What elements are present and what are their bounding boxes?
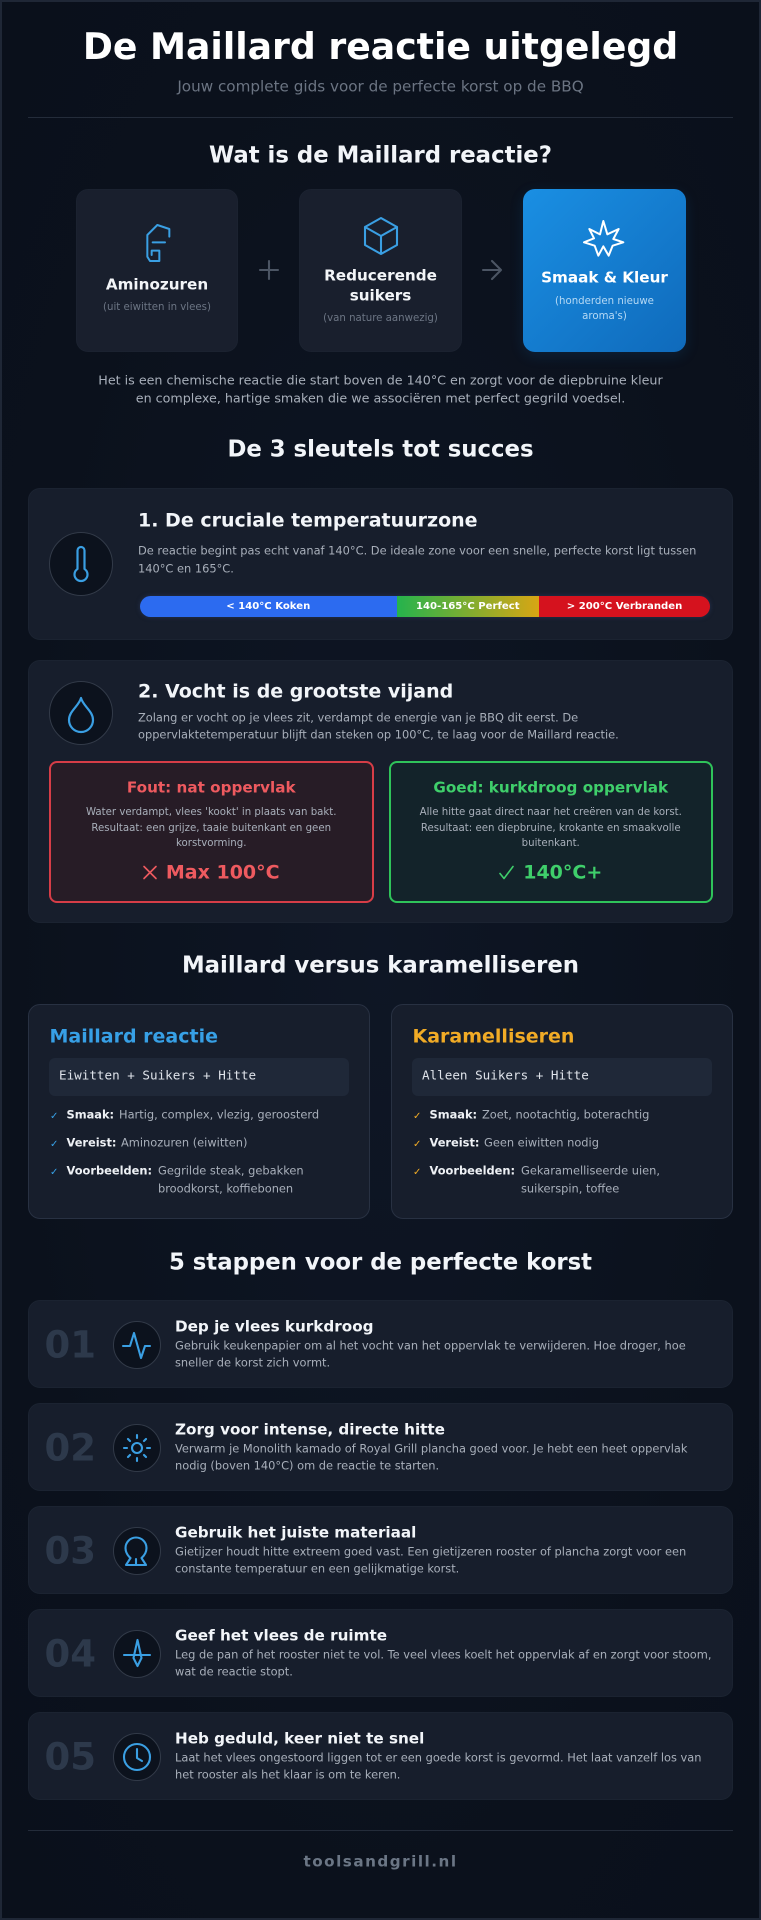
icon: pulse (113, 1321, 161, 1369)
list: ✓ (50, 1167, 58, 1178)
heading: wat is: Wat is de Maillard reactie? (209, 143, 552, 169)
header (83, 25, 678, 95)
step title: Zorg voor intense, directe hitte (175, 1420, 445, 1438)
list: Gegrilde steak, gebakken (158, 1163, 304, 1177)
step text: Gebruik keukenpapier om al het vocht van het oppervlak te verwijderen. Hoe droger, hoe (175, 1338, 686, 1352)
icon: arrow (482, 260, 502, 280)
step 1: 01 (44, 1323, 96, 1366)
callout: fout: Max 100°C (166, 861, 280, 883)
list: ✓ (50, 1139, 58, 1150)
panel: karamelliseren (391, 1004, 733, 1219)
temperature bar: 140-165°C Perfect (416, 601, 520, 612)
temperature bar: > 200°C Verbranden (567, 601, 682, 612)
callout: goed: 140°C+ (523, 861, 602, 883)
panel: maillard (28, 1004, 370, 1219)
list: Gekaramelliseerde uien, (521, 1163, 660, 1177)
step text: Gietijzer houdt hitte extreem goed vast. Een gietijzeren rooster of plancha zorgt voor een (175, 1544, 686, 1558)
formula (49, 1058, 349, 1096)
label: Aminozuren (106, 275, 208, 293)
list: Aminozuren (eiwitten) (121, 1135, 247, 1149)
step text: Laat het vlees ongestoord liggen tot er een goede korst is gevormd. Het laat vanzelf los van (175, 1750, 701, 1764)
temperature bar (140, 596, 710, 617)
icon: plus (259, 260, 279, 280)
sublabel: (van nature aanwezig) (323, 313, 438, 324)
step title: Dep je vlees kurkdroog (175, 1317, 374, 1335)
footer: toolsandgrill.nl (303, 1852, 458, 1870)
temperature bar: < 140°C Koken (226, 601, 310, 612)
step 3: constante temperatuur en een gelijkmatige korst. (175, 1561, 459, 1575)
step 5 (28, 1712, 733, 1800)
heading: 1. De cruciale temperatuurzone (138, 510, 478, 532)
step 2: nodig (boven 140°C) om de reactie te starten. (175, 1458, 439, 1472)
list: ✓ (50, 1111, 58, 1122)
list: suikerspin, toffee (521, 1181, 619, 1195)
list: Hartig, complex, vlezig, geroosterd (119, 1107, 319, 1121)
icon: star burst (583, 220, 624, 257)
panel: suikers: suikers (350, 286, 411, 304)
label: Smaak & Kleur (541, 268, 668, 286)
list: Zoet, nootachtig, boterachtig (482, 1107, 649, 1121)
formula: Eiwitten + Suikers + Hitte (59, 1068, 256, 1083)
panel: aminozuren (76, 189, 238, 352)
callout: fout: Resultaat: een grijze, taaie buitenkant en geen (91, 823, 331, 834)
step 4: wat de reactie stopt. (175, 1664, 293, 1678)
callout: fout: Water verdampt, vlees 'kookt' in plaats van bakt. (86, 807, 337, 818)
heading: stappen: 5 stappen voor de perfecte korst (169, 1250, 592, 1276)
step 2 (28, 1403, 733, 1491)
panel: temperatuur (28, 488, 733, 640)
callout: goed: buitenkant. (522, 838, 580, 849)
list: Smaak: (66, 1107, 114, 1121)
step title: Gebruik het juiste materiaal (175, 1523, 416, 1541)
subtitle: Jouw complete gids voor de perfecte korst op de BBQ (177, 77, 584, 95)
callout: fout: Fout: nat oppervlak (127, 778, 296, 796)
callout: goed (388, 760, 713, 902)
step 5: het rooster als het klaar is om te keren. (175, 1767, 400, 1781)
list: Vereist: (430, 1135, 479, 1149)
panel: suikers (299, 189, 462, 352)
step 3: 03 (44, 1529, 96, 1572)
heading: Karamelliseren (412, 1026, 574, 1048)
heading: 2. Vocht is de grootste vijand (138, 680, 453, 702)
step 1: sneller de korst zich vormt. (175, 1355, 330, 1369)
step text: Verwarm je Monolith kamado of Royal Grill plancha goed voor. Je hebt een heet oppervlak (175, 1441, 688, 1455)
callout: goed: Goed: kurkdroog oppervlak (433, 778, 668, 796)
icon: clock (113, 1733, 161, 1781)
list: Voorbeelden: (430, 1163, 515, 1177)
step 5: 05 (44, 1735, 96, 1778)
callout: goed: Resultaat: een diepbruine, krokante en smaakvolle (421, 823, 681, 834)
title: De Maillard reactie uitgelegd (83, 25, 678, 68)
intro paragraph: Het is een chemische reactie die start boven de 140°C en zorgt voor de diepbruine kleur (98, 373, 663, 388)
icon: cube (364, 217, 398, 255)
heading: Maillard reactie (50, 1026, 218, 1048)
body: De reactie begint pas echt vanaf 140°C. De ideale zone voor een snelle, perfecte korst ligt tussen (138, 543, 696, 557)
step 4: 04 (44, 1632, 96, 1675)
formula: Alleen Suikers + Hitte (422, 1068, 589, 1083)
intro paragraph: en complexe, hartige smaken die we associëren met perfect gegrild voedsel. (136, 391, 625, 406)
panel: temperatuur: 140°C en 165°C. (138, 561, 234, 575)
callout: goed: Alle hitte gaat direct naar het creëren van de korst. (420, 807, 682, 818)
list (50, 1107, 319, 1195)
list: broodkorst, koffiebonen (158, 1181, 293, 1195)
list: Smaak: (430, 1107, 477, 1121)
list: ✓ (413, 1139, 421, 1150)
list: ✓ (413, 1167, 421, 1178)
icon: bell (113, 1527, 161, 1575)
heading: sleutels: De 3 sleutels tot succes (227, 437, 534, 463)
callout: fout: korstvorming. (176, 838, 246, 849)
panel: smaak en kleur: aroma's) (582, 311, 627, 322)
intro paragraph (98, 373, 663, 406)
callout: fout (49, 760, 374, 902)
list: Voorbeelden: (66, 1163, 152, 1177)
step text: Leg de pan of het rooster niet te vol. Te veel vlees koelt het oppervlak af en zorgt voor stoom, (175, 1647, 711, 1661)
formula (412, 1058, 712, 1096)
step 1 (28, 1300, 733, 1388)
body: Zolang er vocht op je vlees zit, verdampt de energie van je BBQ dit eerst. De (138, 710, 578, 724)
icon: water drop (49, 681, 113, 745)
list: Geen eiwitten nodig (484, 1135, 599, 1149)
step title: Heb geduld, keer niet te snel (175, 1729, 424, 1747)
step title: Geef het vlees de ruimte (175, 1626, 387, 1644)
list: ✓ (413, 1111, 421, 1122)
icon: sun (113, 1424, 161, 1472)
list: Vereist: (66, 1135, 116, 1149)
step 3 (28, 1506, 733, 1594)
step 2: 02 (44, 1426, 96, 1469)
panel: vocht (28, 660, 733, 923)
label: Reducerende (324, 266, 437, 284)
icon: compass (113, 1630, 161, 1678)
icon: thermometer (49, 532, 113, 596)
heading: versus: Maillard versus karamelliseren (182, 953, 579, 979)
panel: vocht: oppervlaktetemperatuur blijft dan steken op 100°C, te laag voor de Maillard reactie. (138, 727, 619, 741)
sublabel: (honderden nieuwe (555, 296, 654, 307)
icon: amino (146, 224, 170, 262)
sublabel: (uit eiwitten in vlees) (103, 302, 211, 313)
panel: smaak en kleur (523, 189, 686, 352)
step 4 (28, 1609, 733, 1697)
list (413, 1107, 660, 1195)
